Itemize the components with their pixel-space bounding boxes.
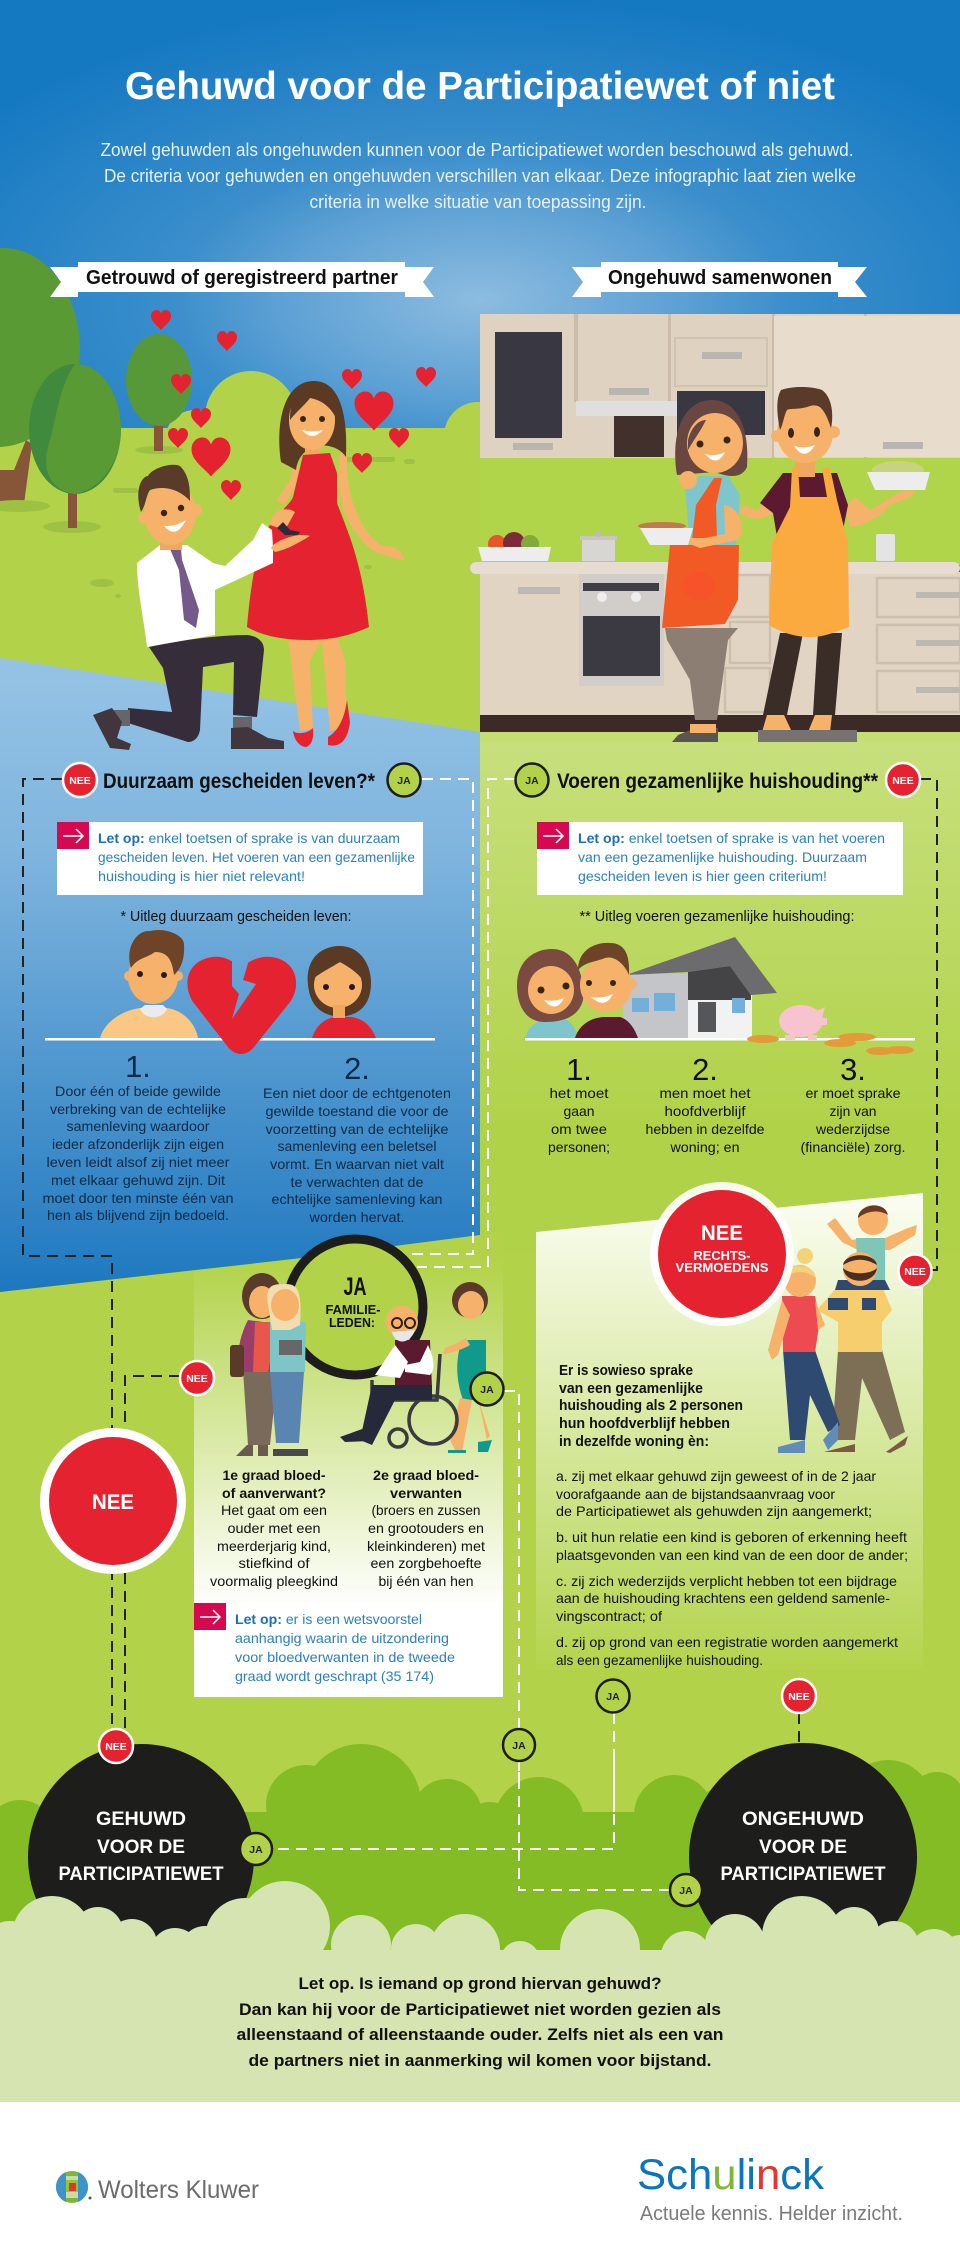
badge: ja familie bbox=[470, 1372, 504, 1406]
badge: nee duurzaam: NEE bbox=[69, 775, 91, 787]
text: sowieso sprake: in dezelfde woning èn: bbox=[559, 1434, 709, 1450]
old man bbox=[340, 1306, 434, 1445]
man bbox=[575, 943, 638, 1038]
column: 2 huishouding: hoofdverblijf bbox=[664, 1103, 746, 1119]
column: 2 duurzaam: worden hervat. bbox=[308, 1209, 404, 1225]
text: criteria a-d: vingscontract; of bbox=[556, 1608, 662, 1624]
text: sowieso sprake: huishouding als 2 personen bbox=[559, 1398, 743, 1414]
hearts bbox=[151, 310, 436, 500]
column: 2 duurzaam: samenleving een beletsel bbox=[278, 1138, 436, 1154]
illustration: kneeling man with ring bbox=[93, 465, 310, 750]
floor bbox=[480, 732, 960, 742]
connectors over hills bbox=[272, 1760, 670, 1890]
circle: nee rechtsvermoedens bbox=[650, 1182, 794, 1326]
column: 2 duurzaam bbox=[263, 1051, 451, 1225]
column: 1 huishouding: 1. bbox=[566, 1052, 592, 1087]
illustration: kitchen bbox=[470, 314, 960, 742]
text: 2e graad: een zorgbehoefte bbox=[370, 1555, 482, 1571]
tree: small bbox=[126, 334, 192, 454]
woman bbox=[517, 949, 583, 1038]
column: 1 huishouding bbox=[548, 1052, 610, 1155]
banner: left: Getrouwd of geregistreerd partner bbox=[86, 267, 398, 289]
badge: nee huishouding bbox=[886, 763, 920, 797]
badge: nee familie bbox=[180, 1361, 214, 1395]
woman bbox=[308, 946, 376, 1038]
closing note: Dan kan hij voor de Participatiewet niet worden gezien als bbox=[239, 2001, 721, 2019]
callout: let op left: gescheiden leven. Het voeren van een gezamenlijke bbox=[98, 849, 415, 865]
illustration: couple in kitchen, woman bbox=[638, 400, 747, 742]
text: 2e graad: 2e graad bloed- bbox=[373, 1467, 479, 1483]
scene: garden proposal bbox=[0, 248, 512, 740]
column: 3 huishouding: er moet sprake bbox=[806, 1085, 901, 1101]
column: 2 duurzaam: vormt. En waarvan niet valt bbox=[270, 1156, 444, 1172]
text: criteria a-d: voorafgaande aan de bijstandsaanvraag voor bbox=[556, 1486, 835, 1502]
column: 1 duurzaam: 1. bbox=[125, 1049, 151, 1084]
column: 2 huishouding: hebben in dezelfde bbox=[646, 1121, 765, 1137]
illustration: two women bbox=[230, 1273, 308, 1456]
column: 1 huishouding: gaan bbox=[564, 1103, 594, 1119]
illustration: couple, house, piggy bank and coins bbox=[517, 937, 915, 1055]
father bbox=[817, 1252, 908, 1453]
text: 2e graad: (broers en zussen bbox=[372, 1502, 480, 1518]
text: criteria a-d bbox=[556, 1468, 908, 1668]
salad bowl bbox=[867, 461, 930, 490]
intro text: criteria in welke situatie van toepassing zijn. bbox=[310, 192, 646, 212]
circle: ongehuwd: VOOR DE bbox=[759, 1837, 847, 1858]
column: 2 duurzaam: Een niet door de echtgenoten bbox=[263, 1085, 451, 1101]
closing note: Let op. Is iemand op grond hiervan gehuwd? bbox=[298, 1975, 662, 1993]
badge: nee rechtsvermoedens: NEE bbox=[904, 1266, 926, 1278]
badge: nee duurzaam bbox=[63, 763, 97, 797]
logo: schulinck bbox=[637, 2151, 903, 2225]
circle: ja familieleden: LEDEN: bbox=[329, 1315, 375, 1330]
panel: green right background bbox=[480, 732, 960, 1252]
text: criteria a-d: aan de huishouding krachtens een geldend samenle- bbox=[556, 1590, 890, 1606]
column: 2 huishouding bbox=[646, 1052, 765, 1155]
column: 2 duurzaam: voorzetting van de echtelijke bbox=[266, 1121, 449, 1137]
badge: ja huishouding: JA bbox=[525, 775, 539, 787]
bushes and lawn bbox=[0, 371, 512, 740]
panel: familieleden bbox=[194, 1232, 503, 1697]
badge: nee gehuwd: NEE bbox=[105, 1741, 127, 1753]
hills: dark green bbox=[0, 1744, 960, 1960]
footer background bbox=[0, 2102, 960, 2262]
column: 1 huishouding: personen; bbox=[548, 1139, 610, 1155]
title: Gehuwd voor de Participatiewet of niet bbox=[125, 65, 835, 108]
text: 2e graad: verwanten bbox=[390, 1485, 462, 1501]
background: green base bbox=[0, 1230, 960, 1950]
badge: ja rechtsvermoedens bbox=[596, 1680, 630, 1712]
column: 2 huishouding: men moet het bbox=[660, 1085, 751, 1101]
circle: gehuwd bbox=[28, 1744, 254, 1970]
column: 2 huishouding: 2. bbox=[692, 1052, 718, 1087]
banner: right: Ongehuwd samenwonen bbox=[608, 267, 832, 289]
circle: ja familieleden: JA bbox=[344, 1273, 366, 1301]
intro text: Zowel gehuwden als ongehuwden kunnen voor de Participatiewet worden beschouwd als gehuwd. bbox=[100, 140, 854, 160]
grass specks bbox=[90, 457, 415, 598]
tree: far left bbox=[0, 248, 80, 512]
column: 1 huishouding: om twee bbox=[551, 1121, 607, 1137]
banner: left bbox=[50, 262, 434, 297]
logo: schulinck: Schulinck bbox=[637, 2151, 825, 2199]
logo: schulinck: Actuele kennis. Helder inzicht. bbox=[640, 2203, 903, 2225]
intro text: De criteria voor gehuwden en ongehuwden verschillen van elkaar. Deze infographic laat zien welke bbox=[104, 166, 856, 186]
bowl bbox=[638, 522, 693, 545]
circle: ongehuwd: ONGEHUWD bbox=[742, 1809, 864, 1830]
text: criteria a-d: plaatsgevonden van een kind van de een door de ander; bbox=[556, 1547, 908, 1563]
column: 1 duurzaam: verbreking van de echtelijke bbox=[50, 1101, 226, 1117]
column: 3 huishouding: 3. bbox=[840, 1052, 866, 1087]
circle: gehuwd: VOOR DE bbox=[97, 1837, 185, 1858]
text: sowieso sprake: Er is sowieso sprake bbox=[559, 1363, 693, 1379]
cup bbox=[876, 534, 895, 561]
callout: let op right bbox=[537, 822, 903, 895]
carer bbox=[443, 1282, 492, 1453]
badge: nee familie: NEE bbox=[186, 1373, 208, 1385]
coins bbox=[747, 1033, 914, 1055]
column: 1 duurzaam: Door één of beide gewilde bbox=[55, 1083, 221, 1099]
badge: nee rechtsvermoedens onder bbox=[782, 1679, 816, 1713]
badge: ja gehuwd bbox=[240, 1833, 272, 1865]
circle: nee rechtsvermoedens: NEE bbox=[701, 1222, 743, 1245]
callout: let op right: van een gezamenlijke huishouding. Duurzaam bbox=[578, 849, 867, 865]
column: 1 duurzaam: ieder afzonderlijk zijn eigen bbox=[52, 1136, 224, 1152]
text: 1e graad: stiefkind of bbox=[238, 1555, 310, 1571]
callout text: Let op: er is een wetsvoorstel bbox=[235, 1611, 422, 1627]
column: 1 duurzaam: met elkaar gehuwd zijn. Dit bbox=[51, 1172, 225, 1188]
tree: front bbox=[29, 364, 121, 533]
badge: nee rechtsvermoedens onder: NEE bbox=[788, 1691, 810, 1703]
text: criteria a-d: d. zij op grond van een registratie worden aangemerkt bbox=[556, 1634, 898, 1650]
column: 3 huishouding: (financiële) zorg. bbox=[800, 1139, 906, 1155]
text: criteria a-d: a. zij met elkaar gehuwd zijn geweest of in de 2 jaar bbox=[556, 1468, 876, 1484]
closing note bbox=[236, 1975, 724, 2070]
callout text: aanhangig waarin de uitzondering bbox=[235, 1630, 449, 1646]
column: 3 huishouding: zijn van bbox=[830, 1103, 876, 1119]
column: 2 duurzaam: gewilde toestand die voor de bbox=[266, 1103, 449, 1119]
pot bbox=[580, 531, 617, 561]
text: criteria a-d: b. uit hun relatie een kind is geboren of erkenning heeft bbox=[556, 1529, 907, 1545]
callout: let op left bbox=[57, 822, 423, 895]
circle: ongehuwd bbox=[689, 1743, 917, 1971]
text: 2e graad: en grootouders en bbox=[368, 1520, 484, 1536]
text: criteria a-d: c. zij zich wederzijds verplicht hebben tot een bijdrage bbox=[556, 1573, 897, 1589]
illustration: couple in kitchen, man bbox=[740, 387, 930, 742]
wheelchair bbox=[372, 1354, 457, 1447]
illustration: family with child bbox=[768, 1205, 917, 1453]
text: criteria a-d: als een gezamenlijke huishouding. bbox=[556, 1652, 763, 1668]
upper cabinets bbox=[480, 314, 960, 458]
badge: ja connector bbox=[503, 1729, 535, 1761]
callout text: voor bloedverwanten in de tweede bbox=[235, 1649, 455, 1665]
circle: ja familieleden: FAMILIE- bbox=[326, 1302, 380, 1317]
callout: let op left: Let op: enkel toetsen of sprake is van duurzaam bbox=[98, 830, 400, 846]
badge: ja duurzaam: JA bbox=[397, 775, 411, 787]
badge: nee huishouding: NEE bbox=[892, 775, 914, 787]
column: 1 duurzaam: hen als blijvend zijn bedoeld. bbox=[47, 1207, 229, 1223]
broken heart bbox=[187, 950, 296, 1054]
oven hood bbox=[576, 401, 683, 416]
column: 1 duurzaam bbox=[42, 1049, 234, 1223]
badge: ja ongehuwd: JA bbox=[679, 1885, 693, 1897]
circle: ongehuwd: PARTICIPATIEWET bbox=[720, 1864, 886, 1885]
column: 2 duurzaam: 2. bbox=[344, 1051, 370, 1086]
callout: let op right: Let op: enkel toetsen of sprake is van het voeren bbox=[578, 830, 885, 846]
circle: nee rechtsvermoedens: VERMOEDENS bbox=[676, 1260, 769, 1275]
callout arrow bbox=[194, 1603, 226, 1630]
mother bbox=[768, 1248, 840, 1453]
illustration: woman in red dress bbox=[247, 381, 404, 747]
column: 3 huishouding: wederzijdse bbox=[815, 1121, 890, 1137]
text: 1e graad bbox=[210, 1467, 338, 1589]
piggy bank bbox=[779, 1005, 827, 1040]
illustration: man in wheelchair and carer bbox=[340, 1282, 492, 1453]
logo: wolters kluwer: Wolters Kluwer bbox=[98, 2176, 259, 2204]
circle: nee: NEE bbox=[92, 1491, 134, 1514]
text: sowieso sprake: hun hoofdverblijf hebben bbox=[559, 1416, 730, 1432]
hills: pale green band bbox=[0, 1881, 960, 2102]
text: 1e graad: Het gaat om een bbox=[221, 1502, 327, 1518]
column: 2 duurzaam: te verwachten dat de bbox=[290, 1174, 424, 1190]
text: 1e graad: ouder met een bbox=[228, 1520, 320, 1536]
column: 1 duurzaam: leven leidt alsof zij niet meer bbox=[46, 1154, 230, 1170]
background: sky bbox=[0, 0, 960, 740]
callout text: graad wordt geschrapt (35 174) bbox=[235, 1668, 434, 1684]
badge: nee gehuwd bbox=[99, 1729, 133, 1763]
callout: let op right: gescheiden leven is hier geen criterium! bbox=[578, 868, 827, 884]
circle: nee bbox=[40, 1428, 186, 1574]
badge: nee rechtsvermoedens bbox=[898, 1254, 932, 1288]
logo: wolters kluwer bbox=[56, 2171, 259, 2204]
column: 2 duurzaam: echtelijke samenleving kan bbox=[272, 1191, 442, 1207]
text: 1e graad: of aanverwant? bbox=[222, 1485, 326, 1501]
badge: ja ongehuwd bbox=[670, 1874, 702, 1906]
circle: gehuwd: PARTICIPATIEWET bbox=[58, 1864, 224, 1885]
text: 2e graad bbox=[367, 1467, 485, 1589]
badge: ja rechtsvermoedens: JA bbox=[606, 1691, 620, 1703]
text: sowieso sprake bbox=[559, 1363, 743, 1450]
closing note: de partners niet in aanmerking wil komen voor bijstand. bbox=[248, 2052, 712, 2070]
badge: ja gehuwd: JA bbox=[249, 1844, 263, 1856]
dark panel bbox=[495, 332, 562, 438]
circle: ja familieleden bbox=[287, 1239, 423, 1375]
man bbox=[100, 930, 198, 1038]
text: 2e graad: bij één van hen bbox=[378, 1573, 474, 1589]
text: 1e graad: meerderjarig kind, bbox=[217, 1538, 331, 1554]
intro text bbox=[100, 140, 856, 212]
callout: let op left: huishouding is hier niet relevant! bbox=[98, 868, 305, 884]
text: 1e graad: 1e graad bloed- bbox=[222, 1467, 326, 1483]
backsplash bbox=[480, 455, 960, 565]
callout text bbox=[235, 1611, 455, 1684]
closing note: alleenstaand of alleenstaande ouder. Zelfs niet als een van bbox=[236, 2026, 724, 2044]
badge: ja familie: JA bbox=[480, 1384, 494, 1396]
fruit bowl bbox=[478, 532, 551, 561]
column: 3 huishouding bbox=[800, 1052, 906, 1155]
heading: duurzaam gescheiden leven: Duurzaam gescheiden leven?* bbox=[103, 770, 376, 793]
badge: ja duurzaam bbox=[388, 764, 420, 796]
column: 1 huishouding: het moet bbox=[550, 1085, 609, 1101]
circle: nee rechtsvermoedens: RECHTS- bbox=[694, 1248, 750, 1263]
child bbox=[827, 1205, 917, 1280]
panel: rechtsvermoedens bbox=[536, 1193, 923, 1670]
badge: ja huishouding bbox=[516, 764, 548, 796]
subheading: uitleg huishouding: ** Uitleg voeren gezamenlijke huishouding: bbox=[580, 908, 854, 925]
panel: blue left background bbox=[0, 658, 480, 1292]
illustration: separated couple and broken heart bbox=[45, 930, 435, 1054]
plinth bbox=[480, 715, 960, 732]
column: 1 duurzaam: samenleving waardoor bbox=[66, 1118, 210, 1134]
banner: right bbox=[572, 262, 867, 297]
column: 1 duurzaam: moet door ten minste één van bbox=[42, 1190, 234, 1206]
text: 2e graad: kleinkinderen) met bbox=[367, 1538, 485, 1554]
circle: gehuwd: GEHUWD bbox=[96, 1809, 186, 1830]
text: criteria a-d: de Participatiewet als gehuwden zijn aangemerkt; bbox=[556, 1503, 872, 1519]
counter and cabinets bbox=[480, 572, 960, 715]
text: sowieso sprake: van een gezamenlijke bbox=[559, 1381, 703, 1397]
subheading: uitleg duurzaam: * Uitleg duurzaam gescheiden leven: bbox=[120, 908, 352, 925]
badge: ja connector: JA bbox=[512, 1740, 526, 1752]
house bbox=[623, 937, 777, 1038]
text: 1e graad: voormalig pleegkind bbox=[210, 1573, 338, 1589]
oven bbox=[579, 574, 664, 686]
column: 2 huishouding: woning; en bbox=[669, 1139, 740, 1155]
connector lines bbox=[23, 779, 937, 1890]
heading: voeren gezamenlijke huishouding: Voeren gezamenlijke huishouding** bbox=[557, 770, 879, 793]
